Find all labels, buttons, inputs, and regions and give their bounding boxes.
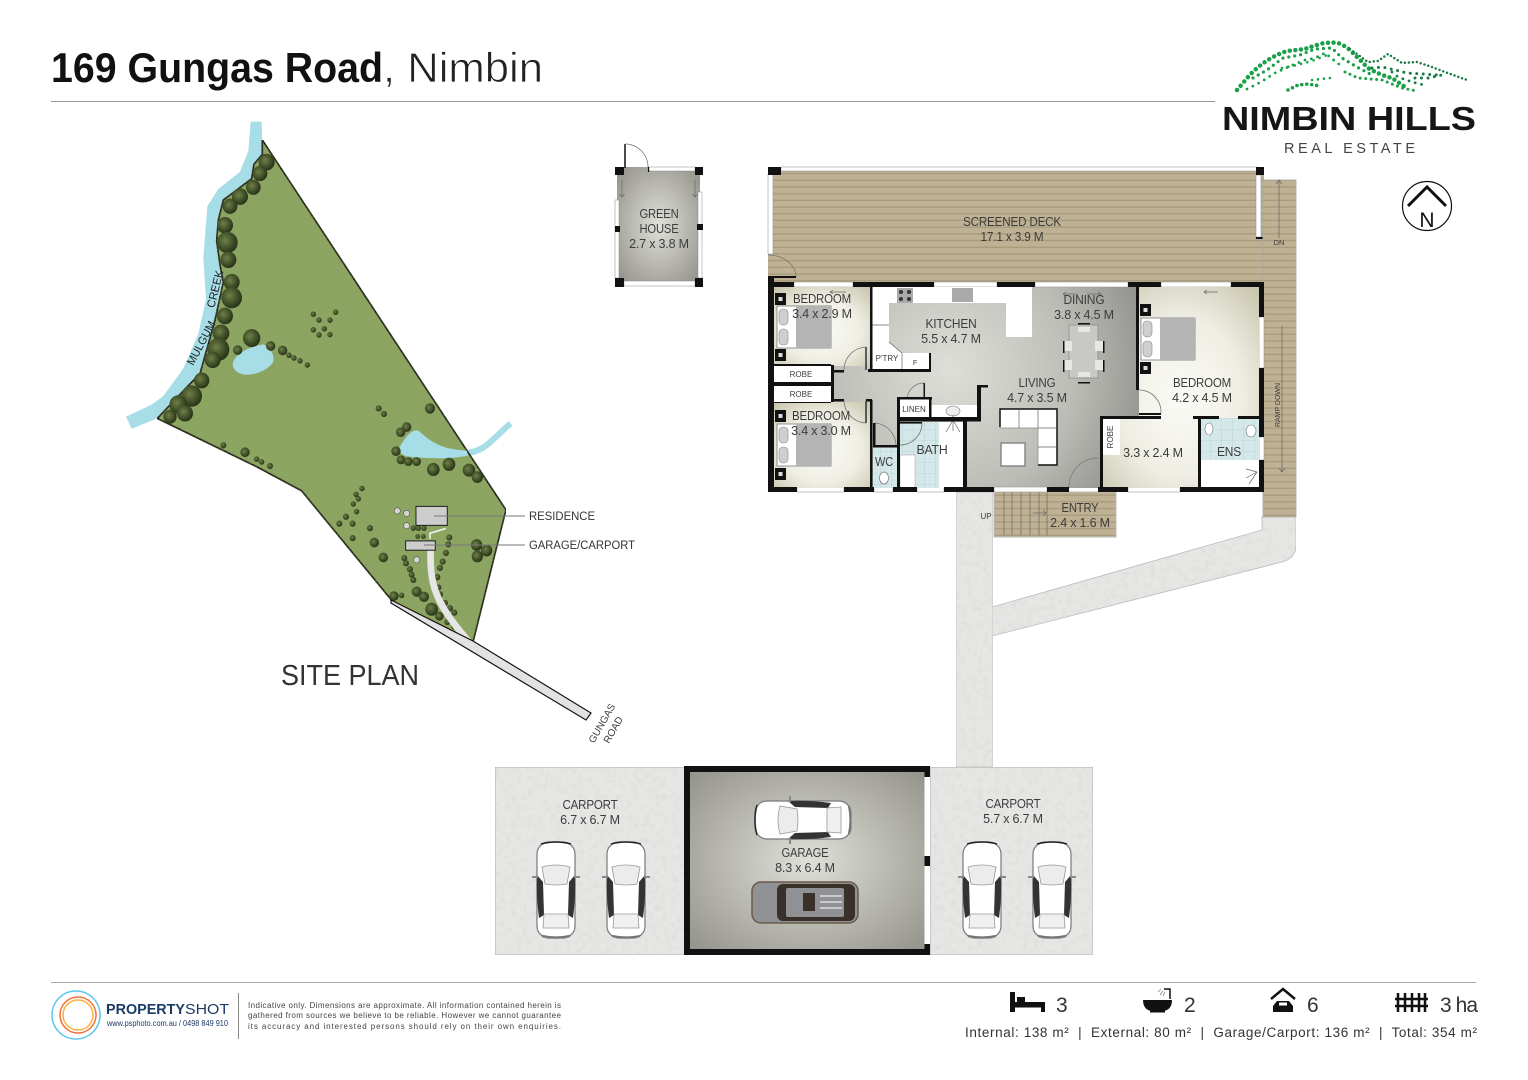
concrete paths — [956, 492, 1296, 767]
land parcel — [157, 140, 506, 641]
stats: land area: 3 ha — [1440, 994, 1478, 1017]
logo tagline: REAL ESTATE — [1284, 141, 1415, 157]
disclaimer: Indicative only. Dimensions are approximate. All information contained herein is — [248, 1001, 561, 1010]
carport west label: CARPORT — [562, 798, 618, 812]
ensuite — [1201, 418, 1259, 488]
living furniture — [1000, 376, 1098, 488]
entry deck: UP — [980, 512, 992, 521]
logo: Property Shot — [52, 991, 229, 1039]
living floor — [774, 287, 1260, 488]
master bedroom: 4.2 x 4.5 M — [1172, 391, 1232, 405]
logo: Property Shot: www.psphoto.com.au / 0498 849 910 — [106, 1019, 228, 1028]
panel: carport west — [495, 767, 685, 955]
garage label: 8.3 x 6.4 M — [775, 861, 835, 875]
label: Mulgum creek: MULGUM — [185, 319, 218, 367]
entry deck: 2.4 x 1.6 M — [1050, 516, 1110, 530]
carport east label: CARPORT — [986, 797, 1041, 811]
kitchen benches — [872, 287, 1032, 370]
garage label — [775, 846, 835, 875]
car — [532, 842, 580, 938]
carport west label: 6.7 x 6.7 M — [560, 813, 620, 827]
screened deck: SCREENED DECK — [963, 215, 1062, 229]
creek — [126, 122, 262, 429]
dining table — [1054, 292, 1114, 384]
trees — [163, 154, 492, 630]
linen cupboard: LINEN — [902, 405, 926, 414]
bedroom: north west: BEDROOM — [793, 292, 851, 306]
linen cupboard — [900, 383, 929, 417]
garage building — [406, 541, 435, 550]
disclaimer — [248, 1001, 562, 1031]
label: Gungas road — [587, 702, 630, 752]
stats: floor areas: Internal: 138 m² | External: 80 m² | Garage/Carport: 136 m² | Total: 354 m² — [965, 1025, 1478, 1040]
greenhouse label: HOUSE — [640, 222, 678, 236]
kitchen benches: 5.5 x 4.7 M — [921, 332, 981, 346]
logo: Property Shot: SHOT — [185, 1002, 229, 1018]
living furniture: LIVING — [1018, 376, 1056, 390]
ramp: DN — [1274, 238, 1284, 247]
car — [958, 842, 1006, 938]
ramp: RAMP DOWN — [1273, 383, 1282, 427]
driveway — [431, 550, 468, 641]
icon: north arrow: N — [1419, 209, 1435, 232]
kitchen benches: F — [913, 360, 917, 367]
WC: WC — [875, 455, 893, 469]
logo wordmark: NIMBIN HILLS — [1222, 101, 1476, 138]
bathroom: BATH — [916, 443, 948, 457]
panel: site plan — [126, 122, 635, 752]
label: Gungas road: GUNGAS — [587, 702, 618, 745]
bathroom — [900, 405, 977, 488]
greenhouse label: 2.7 x 3.8 M — [629, 237, 689, 251]
title: 169 Gungas Road — [51, 44, 383, 91]
access road — [391, 600, 591, 720]
master bedroom: BEDROOM — [1173, 376, 1231, 390]
master bedroom: ROBE — [1106, 426, 1115, 448]
entry deck — [980, 492, 1116, 537]
stats: bathrooms: 2 — [1184, 994, 1196, 1017]
entry deck: ENTRY — [1062, 501, 1099, 515]
disclaimer: its accuracy and interested persons should rely on their own enquiries. — [248, 1022, 561, 1031]
car — [755, 796, 851, 844]
screened deck: 17.1 x 3.9 M — [980, 230, 1044, 244]
panel: green house — [615, 144, 703, 287]
greenhouse label: GREEN — [640, 207, 679, 221]
car — [602, 842, 650, 938]
label: creek: CREEK — [206, 269, 226, 309]
greenhouse label — [629, 207, 689, 251]
robes: ROBE — [790, 370, 812, 379]
panel: garage — [684, 766, 930, 955]
bedroom: south west: BEDROOM — [792, 409, 850, 423]
stats: land area — [1395, 993, 1478, 1017]
leader: garage — [424, 544, 525, 546]
living furniture: 4.7 x 3.5 M — [1007, 391, 1067, 405]
dining table: 3.8 x 4.5 M — [1054, 308, 1114, 322]
ramp — [1263, 180, 1296, 517]
master bedroom: 3.3 x 2.4 M — [1123, 446, 1183, 460]
carport east label — [983, 797, 1043, 826]
label: residence: RESIDENCE — [529, 511, 595, 523]
stats: bedrooms — [1010, 992, 1068, 1017]
bedroom: south west: 3.4 x 3.0 M — [791, 424, 851, 438]
screened deck — [768, 167, 1264, 282]
stats: car spaces — [1271, 989, 1319, 1017]
dining table: DINING — [1064, 293, 1104, 307]
stats: bathrooms — [1143, 989, 1196, 1017]
kitchen benches: P'TRY — [876, 354, 899, 363]
bedroom: south west — [774, 401, 871, 488]
heading: site plan: SITE PLAN — [281, 660, 419, 692]
stream from dam — [467, 424, 511, 453]
robes — [774, 366, 831, 402]
master bedroom — [1103, 287, 1259, 488]
ensuite: ENS — [1217, 445, 1241, 459]
stats: car spaces: 6 — [1307, 994, 1319, 1017]
icon: north arrow — [1402, 182, 1452, 232]
logo: Nimbin Hills Real Estate — [1222, 43, 1476, 157]
greenhouse door — [624, 144, 626, 168]
carport east label: 5.7 x 6.7 M — [983, 812, 1043, 826]
bedroom: north west — [774, 287, 870, 370]
title: , Nimbin — [383, 44, 543, 91]
kitchen benches: KITCHEN — [926, 317, 977, 331]
bedroom: north west: 3.4 x 2.9 M — [792, 307, 852, 321]
carport west label — [560, 798, 620, 827]
panel: floor plan — [768, 167, 1296, 537]
panel: carport east — [930, 767, 1093, 955]
residence building — [416, 506, 447, 525]
water tanks — [394, 508, 420, 563]
label: Gungas road: ROAD — [602, 715, 626, 746]
disclaimer: gathered from sources we believe to be reliable. However we cannot guarantee — [248, 1011, 562, 1020]
window frames — [794, 282, 1264, 492]
WC — [873, 423, 897, 488]
walls — [768, 278, 1264, 492]
car — [1028, 842, 1076, 938]
logo: Property Shot: PROPERTY — [106, 1002, 185, 1018]
label: garage carport: GARAGE/CARPORT — [529, 540, 635, 552]
SUV — [752, 882, 858, 923]
dam south — [399, 430, 468, 458]
stats: bedrooms: 3 — [1056, 994, 1068, 1017]
greenhouse floor — [617, 167, 700, 283]
dam north — [233, 344, 274, 375]
garage label: GARAGE — [782, 846, 828, 860]
leader: residence — [434, 515, 525, 517]
robes: ROBE — [790, 390, 812, 399]
icon: dotted hills — [1237, 43, 1467, 91]
